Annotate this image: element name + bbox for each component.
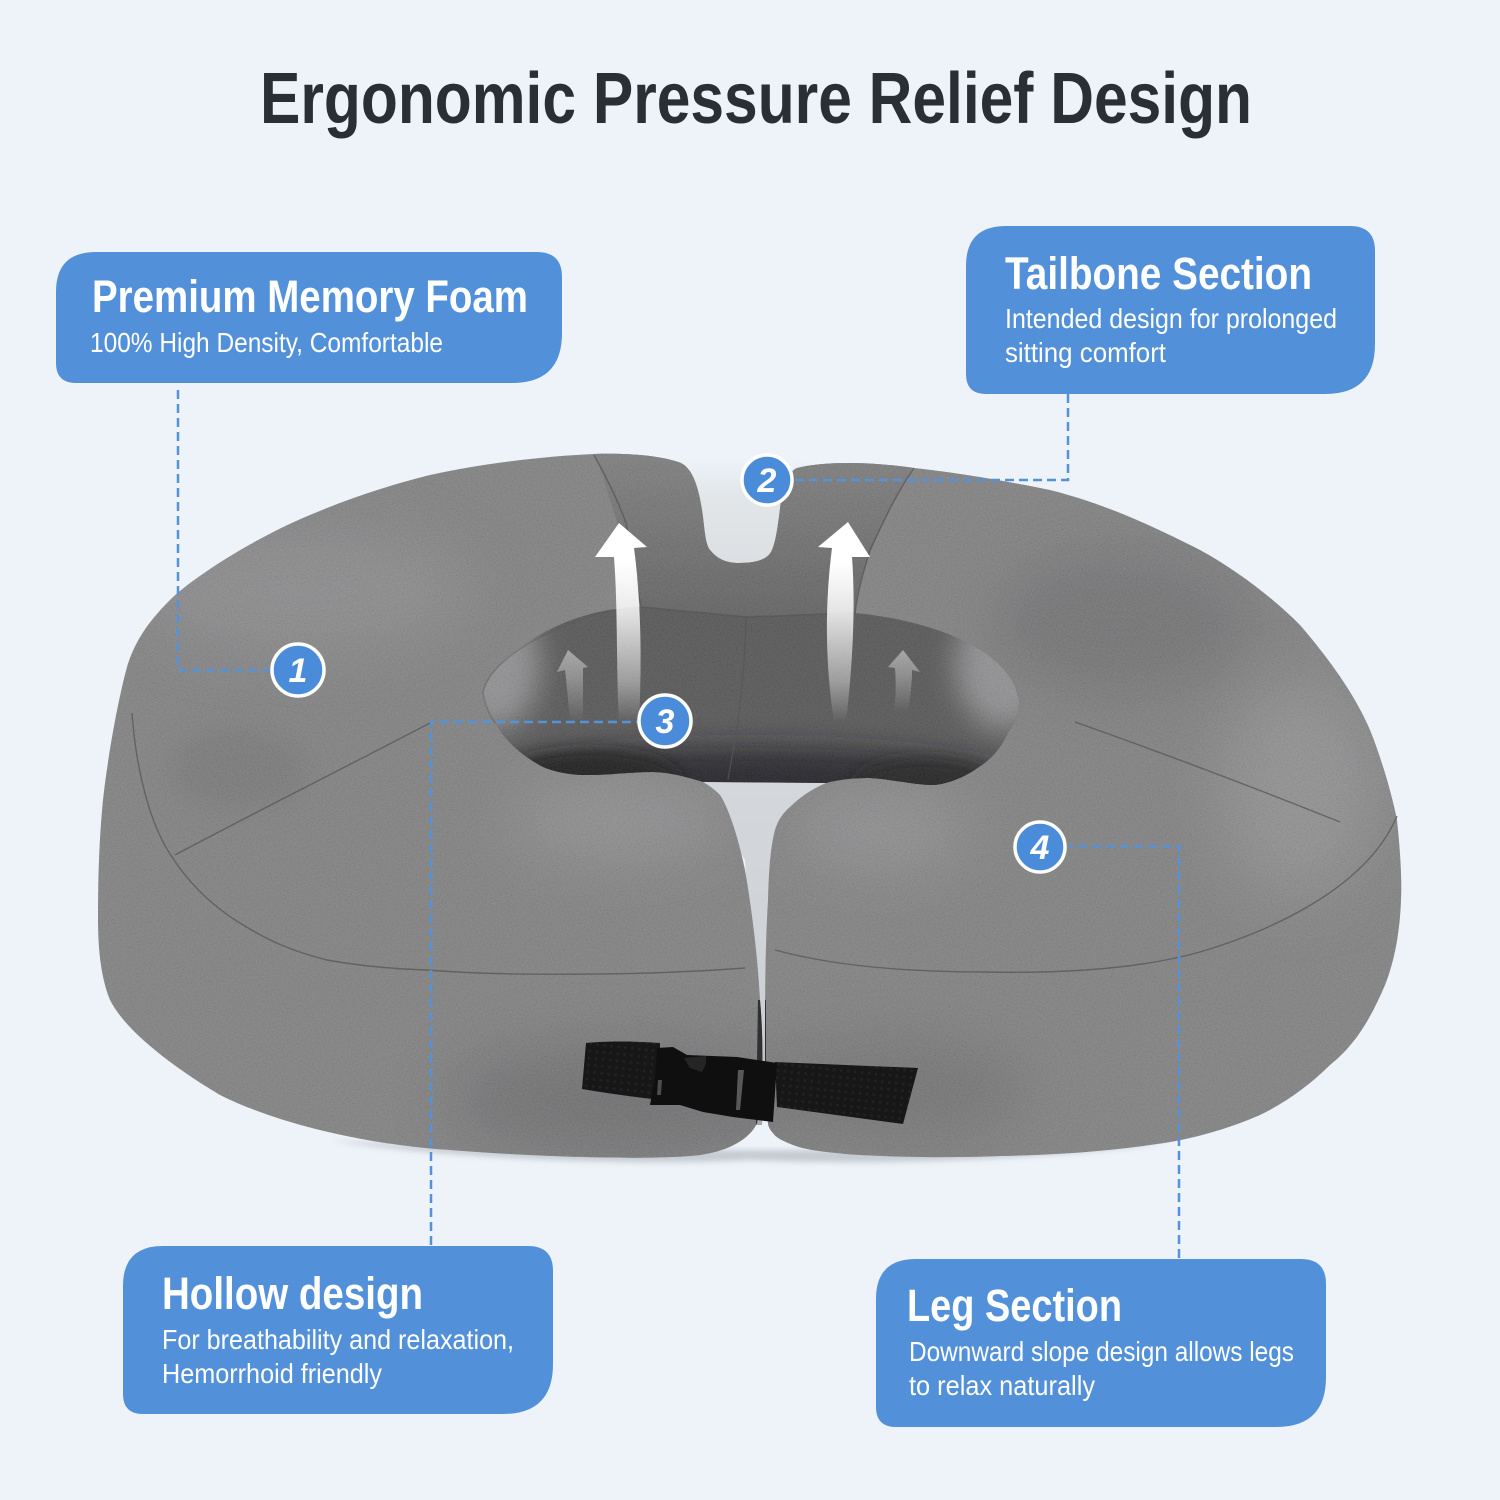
buckle slit left (657, 1080, 662, 1095)
callout: leg section: Downward slope design allows legs (909, 1336, 1294, 1367)
cushion body (90, 440, 1410, 1170)
callout: leg section (876, 1259, 1326, 1427)
badge 1: 1 (289, 652, 307, 690)
shading: front dark right (816, 1049, 1000, 1131)
fabric seams (132, 455, 1397, 974)
right strap (775, 1062, 918, 1124)
buckle body (650, 1047, 777, 1122)
callout: hollow design: Hollow design (162, 1268, 423, 1319)
callout: tailbone section: Intended design for prolonged (1005, 303, 1337, 334)
dashed leader line 2 (795, 394, 1068, 480)
shading: lower-right lobe top light (831, 799, 939, 861)
shading: front dark left (450, 1045, 790, 1155)
callout: hollow design: For breathability and relaxation, (162, 1324, 514, 1355)
large right arrow (818, 522, 870, 722)
tailbone notch (672, 458, 806, 568)
small left arrow (557, 650, 588, 722)
callout: tailbone section (966, 226, 1375, 394)
badge 4: 4 (1030, 829, 1050, 867)
front gap shadow (756, 1000, 766, 1125)
callout: tailbone section: sitting comfort (1005, 337, 1166, 368)
fabric base colour (90, 440, 1410, 1170)
buckle release tab (684, 1056, 706, 1072)
callout: tailbone section: Tailbone Section (1005, 248, 1312, 299)
callout: hollow design: Hemorrhoid friendly (162, 1358, 382, 1389)
inner back wall (594, 450, 914, 617)
badge 4 (1015, 822, 1065, 872)
shading: right shoulder light (1229, 700, 1365, 880)
shading: left mid dark (170, 730, 310, 810)
large left arrow (595, 523, 647, 722)
buckle slit right (736, 1070, 744, 1110)
badge 2: 2 (757, 462, 777, 500)
dashed leader line 1 (178, 390, 272, 670)
callout: premium memory foam (56, 252, 562, 383)
buckle and strap (582, 1042, 918, 1124)
dashed leader line 4 (1068, 846, 1179, 1258)
cushion ground shadow (330, 1140, 1170, 1162)
badge 2 (742, 455, 792, 505)
callout: premium memory foam: Premium Memory Foam (92, 271, 528, 322)
central gap between lobes (695, 775, 835, 1125)
small right arrow (888, 650, 920, 712)
cushion illustration (90, 440, 1410, 1170)
callout: hollow design (123, 1246, 553, 1414)
badge 1 (272, 644, 324, 696)
dashed leader line 3 (431, 722, 640, 1245)
badge 3 (639, 695, 691, 747)
shading: lower-left lobe top light (544, 788, 685, 852)
shading: left shoulder light (160, 536, 413, 614)
hole interior (484, 607, 1019, 785)
callout: leg section: Leg Section (907, 1280, 1122, 1331)
callout: premium memory foam: 100% High Density, Comfortable (90, 327, 443, 358)
shading: back right dark (1011, 563, 1232, 684)
badge 3: 3 (656, 703, 675, 741)
callout: leg section: to relax naturally (909, 1370, 1095, 1401)
title: Ergonomic Pressure Relief Design (260, 59, 1252, 139)
fabric texture (90, 440, 1410, 1170)
left strap (582, 1042, 660, 1100)
